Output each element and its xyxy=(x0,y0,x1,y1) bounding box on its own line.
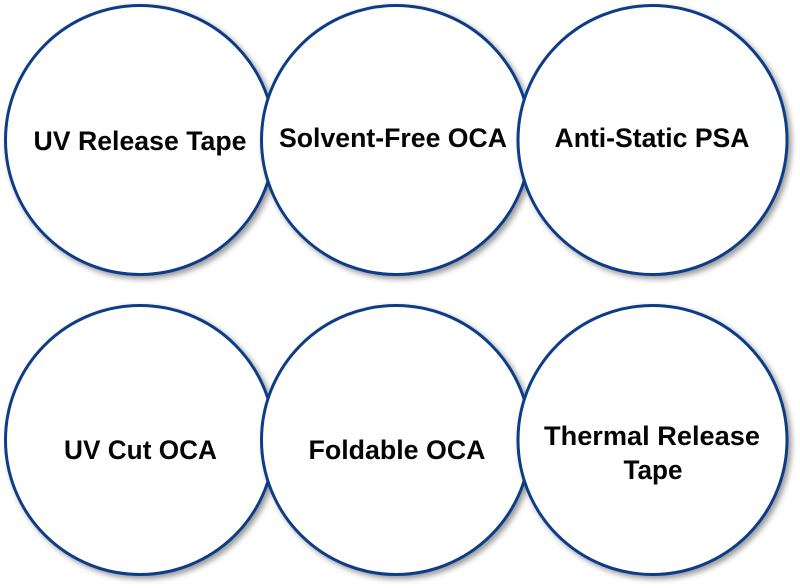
circle: UV Cut OCA: UV Cut OCA xyxy=(64,435,217,465)
circle: UV Release Tape xyxy=(6,6,274,274)
circle: Anti-Static PSA: Anti-Static PSA xyxy=(554,123,750,153)
circle: Anti-Static PSA xyxy=(518,6,787,274)
circle: Solvent-Free OCA: Solvent-Free OCA xyxy=(279,123,507,153)
circle: Foldable OCA: Foldable OCA xyxy=(308,435,486,465)
circle: Thermal Release Tape: Tape xyxy=(624,455,682,485)
circle: Foldable OCA xyxy=(262,306,530,574)
circle: Thermal Release Tape: Thermal Release xyxy=(544,421,760,451)
circle: Thermal Release Tape xyxy=(518,306,787,574)
circle: UV Cut OCA xyxy=(6,306,274,574)
circle: UV Release Tape: UV Release Tape xyxy=(34,126,247,156)
circle: Solvent-Free OCA xyxy=(262,6,530,274)
